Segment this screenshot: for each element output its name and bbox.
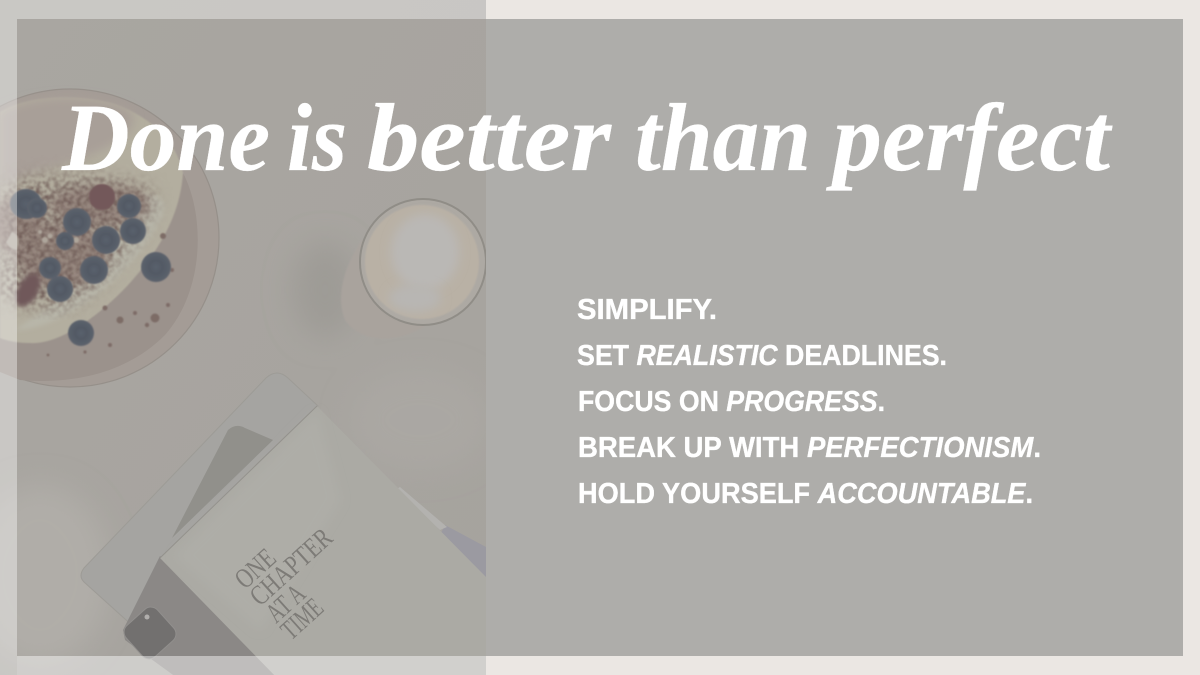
- line: TIME: TIME: [275, 592, 330, 646]
- phone tucked in tablet: [172, 426, 273, 538]
- book title: [236, 530, 334, 639]
- word: is: is: [287, 84, 347, 191]
- latte foam: [365, 205, 479, 319]
- book cover: [160, 406, 486, 675]
- notebook: [160, 406, 486, 675]
- book cover light: [175, 412, 340, 630]
- plate inner shade: [0, 173, 198, 381]
- word: Done: Done: [61, 84, 270, 191]
- panel: grey text panel: [486, 19, 1183, 656]
- tablet under book: [81, 373, 318, 628]
- granola highlights: [6, 230, 79, 250]
- granola base: [0, 185, 150, 287]
- title: [61, 84, 1113, 191]
- pancake: [0, 97, 183, 343]
- word: perfect: perfect: [826, 84, 1113, 191]
- loose crumbs on plate: [47, 233, 174, 356]
- raspberry crumb: [89, 184, 115, 210]
- book spine edge: [160, 406, 317, 558]
- plate with blueberries: [0, 89, 219, 387]
- fabric shading: [17, 259, 342, 647]
- dark device: [120, 556, 280, 675]
- word: than: than: [635, 84, 811, 191]
- plate light area behind title: [4, 98, 132, 177]
- device back: [123, 556, 280, 675]
- latte glass: [341, 199, 486, 339]
- photo: flat lay of breakfast plate, latte and book: [0, 0, 490, 675]
- glass rim: [360, 199, 486, 325]
- word: better: better: [367, 84, 613, 191]
- photo margin bottom: [17, 656, 486, 675]
- tip: accountable: HOLD YOURSELF ACCOUNTABLE.: [578, 478, 1033, 510]
- fabric tablecloth: [0, 0, 486, 675]
- photo margin top: [17, 0, 486, 19]
- tip: progress: FOCUS ON PROGRESS.: [578, 386, 885, 418]
- line: ONE: ONE: [229, 543, 282, 595]
- granola speckle texture: [0, 168, 162, 318]
- plate disc: [0, 89, 219, 387]
- line: CHAPTER: CHAPTER: [244, 522, 339, 612]
- blueberries: [10, 189, 171, 346]
- dark crumb cluster: [14, 272, 42, 309]
- camera lens dot: [144, 614, 150, 620]
- photo margin left: [0, 0, 17, 675]
- line: AT A: AT A: [260, 578, 312, 629]
- foam lower highlight: [392, 288, 438, 310]
- foam highlight: [391, 214, 459, 290]
- text block: tips list: [577, 294, 1041, 510]
- tip: realistic deadlines: SET REALISTIC DEADLINES.: [577, 340, 947, 372]
- lavender sliver: [440, 525, 486, 580]
- camera module: [124, 608, 176, 660]
- tip: simplify: SIMPLIFY.: [577, 294, 717, 326]
- ribbed glass body: [342, 276, 349, 312]
- yogurt streak: [26, 198, 162, 326]
- page edge: [395, 487, 447, 530]
- tip: perfectionism: BREAK UP WITH PERFECTIONISM.: [578, 432, 1041, 464]
